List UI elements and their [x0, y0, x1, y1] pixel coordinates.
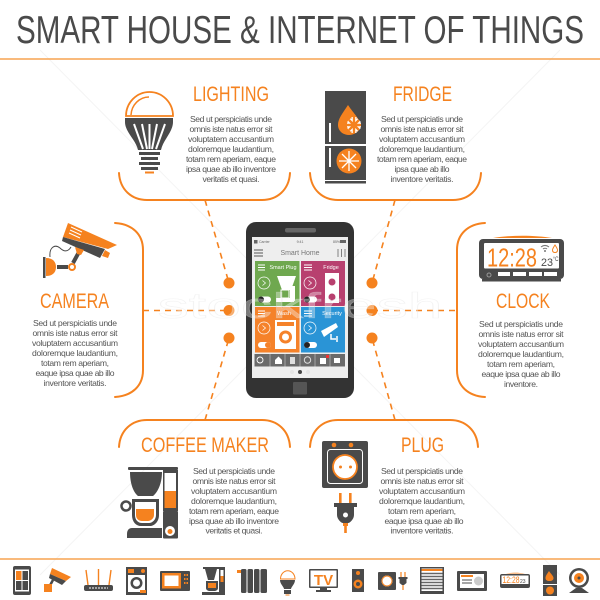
text block: totam rem aperiam,: [388, 506, 456, 516]
app header: [254, 248, 345, 257]
text block: totam rem aperiam,: [41, 358, 109, 368]
text block: Sed ut perspiciatis unde: [190, 114, 272, 124]
text block: doloremque laudantium,: [379, 496, 465, 506]
bracket: [310, 420, 478, 447]
bottom icon strip: [13, 565, 589, 596]
status bar: Carrier: [259, 240, 271, 244]
text block: doloremque laudantium,: [379, 144, 465, 154]
heading: PLUG: [401, 434, 444, 457]
icon: socket plug: [378, 572, 408, 590]
text block: ipsa quae ab illo inventore: [189, 516, 279, 526]
heading: CLOCK: [496, 290, 550, 313]
icon: digital clock: 23: [541, 257, 553, 269]
icon: clock small: 23: [520, 579, 526, 585]
app header: Smart Home: [280, 248, 320, 257]
tile: fridge: Fridge: [323, 265, 339, 271]
text block: eaque ipsa quae ab illo: [36, 368, 115, 378]
text block: omnis iste natus error sit: [192, 476, 276, 486]
text block: omnis iste natus error sit: [380, 476, 464, 486]
tile: wash: Wash: [277, 311, 291, 317]
bracket: [119, 173, 290, 200]
smartphone: [246, 222, 354, 398]
text block: doloremque laudantium,: [32, 348, 118, 358]
text block: totam rem aperiam, eaque: [377, 154, 467, 164]
text block: Sed ut perspiciatis unde: [381, 114, 463, 124]
text block: inventore veritatis.: [44, 378, 106, 388]
text block: doloremque laudantium,: [191, 496, 277, 506]
icon: digital clock: [479, 236, 564, 282]
text block: veritatis et quasi.: [202, 174, 260, 184]
text block: eaque ipsa quae ab illo: [384, 516, 464, 526]
text block: veritatis et quasi.: [206, 526, 262, 536]
icon: webcam: [569, 568, 589, 593]
text block: omnis iste natus error sit: [190, 124, 273, 134]
tile: security: Security: [322, 311, 342, 317]
status bar: 85%: [333, 240, 340, 244]
text block: [189, 466, 279, 536]
bracket: [115, 223, 143, 397]
text block: totam rem aperiam, eaque: [189, 506, 279, 516]
text block: doloremque laudantium,: [188, 144, 274, 154]
icon: clock small: 12:28: [502, 575, 520, 585]
panel: clock: [457, 223, 564, 397]
text block: [32, 318, 118, 388]
icon: digital clock: °C: [553, 257, 559, 263]
text block: voluptatem accusantium: [191, 486, 277, 496]
text block: inventore veritatis.: [390, 174, 454, 184]
text block: doloremque laudantium,: [478, 349, 564, 359]
bracket: [457, 223, 485, 397]
text block: voluptatem accusantium: [379, 134, 465, 144]
text block: voluptatem accusantium: [478, 339, 564, 349]
icon: fridge: [325, 91, 366, 184]
icon: radiator: [237, 569, 267, 593]
text block: voluptatem accusantium: [32, 338, 118, 348]
tile: security: [301, 307, 345, 352]
status bar: [254, 240, 346, 244]
text block: voluptatem accusantium: [188, 134, 274, 144]
page dots: [290, 370, 310, 374]
text block: Sed ut perspiciatis unde: [33, 318, 117, 328]
icon: tablet: [13, 566, 31, 595]
text block: [377, 114, 467, 184]
bracket: [310, 173, 481, 200]
text block: [478, 319, 564, 389]
icon: security camera: [43, 223, 117, 278]
icon: camera: [44, 568, 71, 592]
icon: microwave: [160, 571, 190, 591]
heading: COFFEE MAKER: [141, 434, 269, 457]
icon: router: [84, 569, 113, 591]
panel: fridge: [310, 83, 481, 200]
tile: smart plug: [255, 261, 300, 306]
text block: totam rem aperiam,: [487, 359, 555, 369]
text block: [379, 466, 465, 536]
icon: fridge small: [543, 565, 557, 596]
heading: CAMERA: [40, 290, 109, 313]
bracket: [119, 420, 290, 447]
text block: omnis iste natus error sit: [32, 328, 118, 338]
icon: speaker: [352, 569, 364, 592]
dashed connectors: [143, 200, 457, 420]
text block: inventore veritatis.: [390, 526, 454, 536]
icon toolbar: [254, 354, 345, 366]
tile: fridge: [301, 261, 345, 306]
text block: voluptatem accusantium: [379, 486, 465, 496]
text block: inventore.: [504, 379, 538, 389]
text block: [186, 114, 276, 184]
tile: wash: [255, 307, 300, 352]
panel: lighting: [119, 83, 290, 200]
watermark: stockfresh: [158, 285, 442, 326]
panel: coffee maker: [119, 420, 290, 538]
icon: control panel: [457, 571, 487, 591]
tile: smart plug: Smart Plug: [270, 265, 296, 271]
text block: omnis iste natus error sit: [380, 124, 464, 134]
text block: eaque ipsa quae ab illo: [482, 369, 561, 379]
icon: digital clock: 12:28: [487, 242, 537, 272]
icon: lamp small: [280, 571, 295, 596]
status bar: 9:41: [297, 240, 303, 244]
icon: coffee maker: [122, 467, 178, 538]
heading: LIGHTING: [193, 83, 269, 106]
icon: tv: [309, 569, 338, 592]
icon: blinds: [420, 567, 444, 594]
text block: omnis iste natus error sit: [478, 329, 564, 339]
text block: ipsa quae ab illo: [394, 164, 450, 174]
text block: Sed ut perspiciatis unde: [479, 319, 563, 329]
text block: totam rem aperiam, eaque: [186, 154, 276, 164]
text block: Sed ut perspiciatis unde: [381, 466, 463, 476]
icon: coffee maker small: [202, 567, 225, 595]
icon: tv: TV: [314, 572, 333, 589]
icon: light bulb: [125, 92, 173, 174]
text block: Sed ut perspiciatis unde: [193, 466, 275, 476]
icon: clock small: [500, 573, 530, 588]
text block: ipsa quae ab illo inventore: [186, 164, 276, 174]
heading: FRIDGE: [393, 83, 452, 106]
icon: washing machine: [126, 567, 147, 595]
panel: plug: [310, 420, 478, 536]
icon: socket and plug: [322, 441, 368, 533]
panel: camera: [32, 223, 143, 397]
